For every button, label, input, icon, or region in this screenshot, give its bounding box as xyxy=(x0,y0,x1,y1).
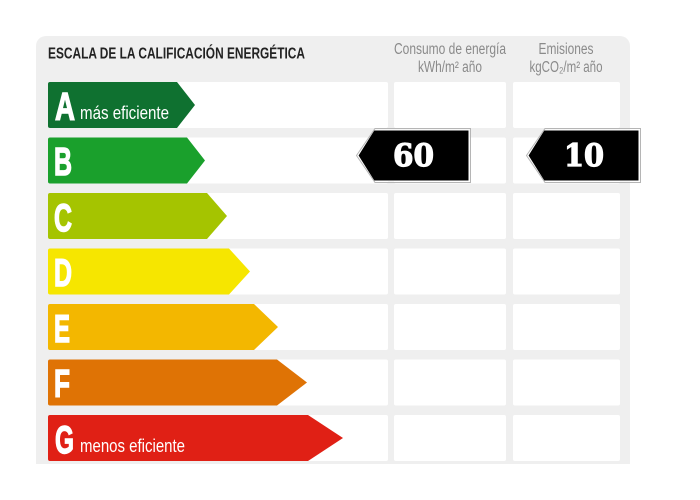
rating bar A xyxy=(48,82,195,129)
consumption value arrow: 60 xyxy=(356,128,470,182)
rating bar A: A xyxy=(55,86,75,129)
rating bar B xyxy=(48,138,205,184)
rating bar E xyxy=(48,304,278,351)
title: ESCALA DE LA CALIFICACIÓN ENERGÉTICA xyxy=(48,44,305,62)
consumption value arrow: 60: 60 xyxy=(393,138,434,174)
emissions value arrow: 10: 10 xyxy=(564,138,604,174)
rating bar G xyxy=(48,415,343,462)
rating bar B: B xyxy=(54,141,72,184)
rating bar G: G xyxy=(55,419,74,462)
rating bar C xyxy=(48,193,227,240)
column heading: energy consumption: kWh/m² año xyxy=(418,59,482,76)
column heading: emissions: Emisiones xyxy=(538,41,594,58)
column heading: emissions xyxy=(530,41,602,76)
column heading: energy consumption: Consumo de energía xyxy=(394,41,506,58)
rating bar D xyxy=(48,248,250,295)
rating bar C: C xyxy=(54,197,72,240)
rating bar A: más eficiente xyxy=(80,103,169,123)
emissions value arrow: 10 xyxy=(526,128,640,182)
column heading: emissions: kgCO₂/m² año xyxy=(530,59,602,76)
column heading: energy consumption xyxy=(394,41,506,76)
rating bar D: D xyxy=(54,252,72,295)
rating bar F xyxy=(48,360,307,406)
rating bar F: F xyxy=(54,363,70,406)
rating bar G: menos eficiente xyxy=(80,436,185,456)
panel: background xyxy=(36,36,630,464)
rating bar E: E xyxy=(54,308,70,351)
white row cells xyxy=(48,82,620,461)
